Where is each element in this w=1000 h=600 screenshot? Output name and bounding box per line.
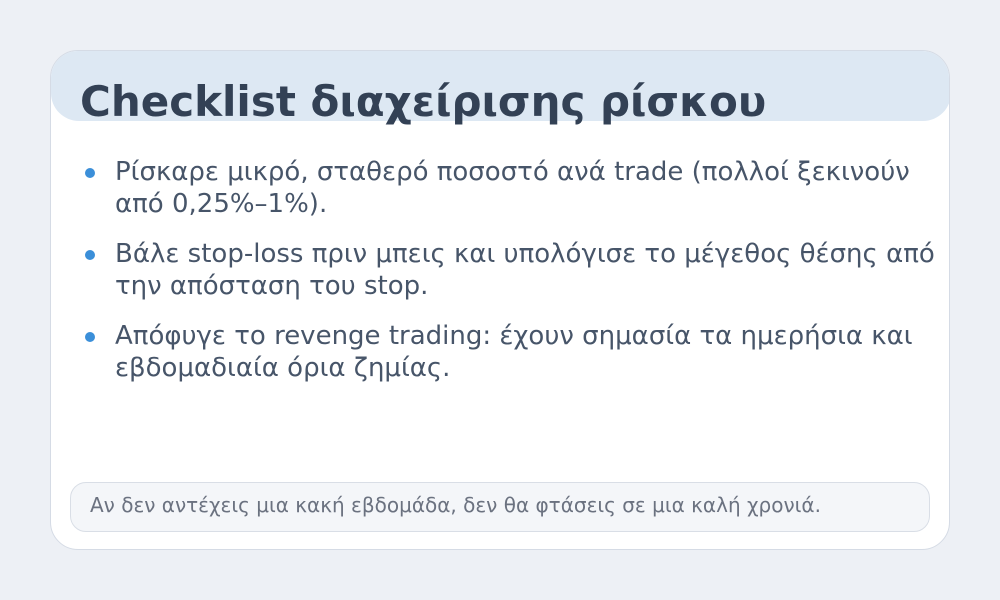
bullet dot 1 (85, 168, 95, 178)
bullet dot 2 (85, 250, 95, 260)
bullet 3: Απόφυγε το revenge trading: έχουν σημασία τα ημερήσια και εβδομαδιαία όρια ζημίας. (115, 321, 913, 383)
header band (51, 51, 951, 121)
footer callout (70, 482, 930, 532)
title: Checklist διαχείρισης ρίσκου (80, 77, 766, 126)
footer callout: Αν δεν αντέχεις μια κακή εβδομάδα, δεν θα φτάσεις σε μια καλή χρονιά. (90, 493, 821, 517)
bullet 2: Βάλε stop-loss πριν μπεις και υπολόγισε το μέγεθος θέσης από την απόσταση του stop. (115, 239, 935, 301)
bullet dot 3 (85, 332, 95, 342)
bullet 1: Ρίσκαρε μικρό, σταθερό ποσοστό ανά trade (πολλοί ξεκινούν από 0,25%–1%). (115, 157, 910, 219)
panel: card (50, 50, 950, 550)
